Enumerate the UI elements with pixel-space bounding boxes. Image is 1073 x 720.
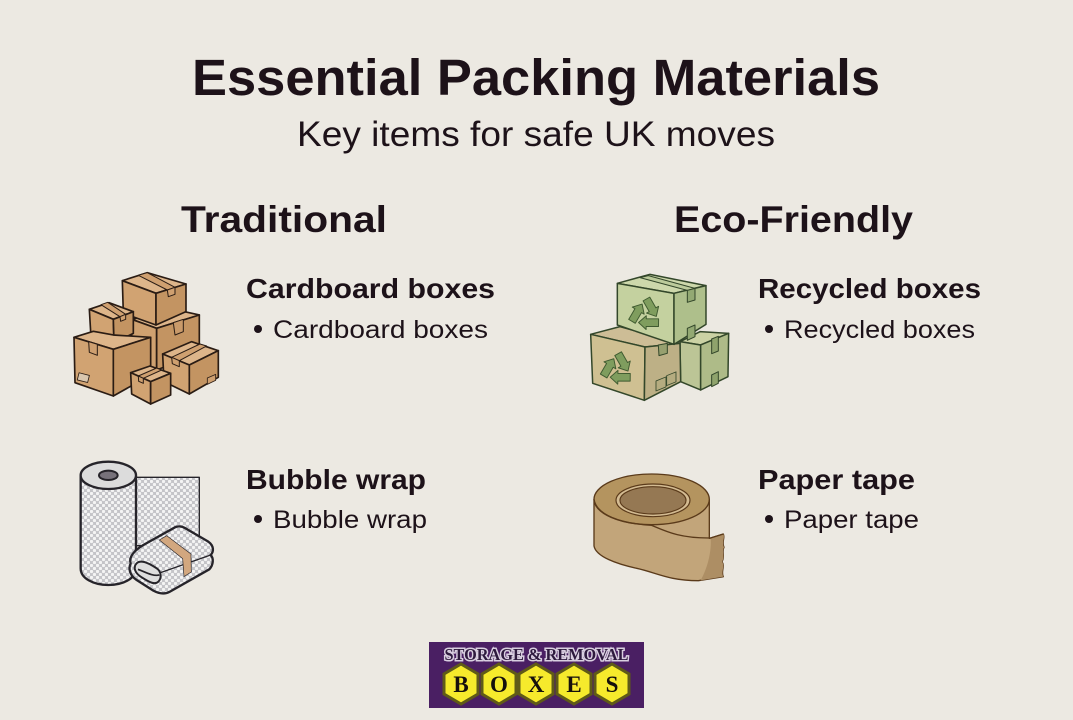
icon: recycled boxes <box>591 274 729 400</box>
roll <box>81 462 136 585</box>
item heading: recycled boxes: Recycled boxes <box>758 273 981 304</box>
logo wordmark: STORAGE & REMOVAL <box>444 645 628 664</box>
bullet item: recycled boxes: Recycled boxes <box>784 316 975 344</box>
item heading: paper tape: Paper tape <box>758 464 915 495</box>
tape edge curve <box>594 499 723 538</box>
tape top ring <box>594 474 709 525</box>
heading: eco-friendly: Eco-Friendly <box>674 199 913 240</box>
logo hexagons <box>444 664 629 704</box>
big left box <box>74 331 151 396</box>
small left box <box>89 302 133 343</box>
tape hole <box>620 487 686 514</box>
logo: storage and removal boxes <box>429 642 644 708</box>
folded pack <box>130 526 213 594</box>
bullet item: cardboard boxes: Cardboard boxes <box>273 316 488 344</box>
icon: bubble wrap <box>81 462 213 594</box>
title: Essential Packing Materials <box>192 49 880 106</box>
small front box <box>131 366 171 404</box>
icon: paper tape <box>594 474 724 581</box>
logo letters: B <box>453 672 469 697</box>
heading: traditional: Traditional <box>181 199 387 240</box>
item heading: cardboard boxes: Cardboard boxes <box>246 273 495 304</box>
bullet item: paper tape: Paper tape <box>784 506 919 534</box>
back box <box>132 310 199 373</box>
logo letters: E <box>566 672 582 697</box>
tape body <box>594 499 724 581</box>
tape shaded side <box>701 534 724 580</box>
panel: traditional <box>74 199 495 594</box>
lower left box <box>591 327 681 400</box>
item heading: bubble wrap: Bubble wrap <box>246 464 426 495</box>
top box <box>617 274 706 344</box>
bullet item: bubble wrap: Bubble wrap <box>273 506 427 534</box>
top box <box>122 273 186 325</box>
right box <box>163 342 218 394</box>
right box <box>680 332 729 390</box>
logo letters: X <box>528 672 545 697</box>
flat sheet <box>132 477 199 546</box>
icon: cardboard boxes <box>74 273 218 404</box>
tape inner ring <box>616 484 690 517</box>
subtitle: Key items for safe UK moves <box>297 115 775 154</box>
logo letters: S <box>606 672 618 697</box>
panel: eco-friendly <box>591 199 981 581</box>
logo letters: O <box>490 672 508 697</box>
logo letters <box>453 672 618 697</box>
